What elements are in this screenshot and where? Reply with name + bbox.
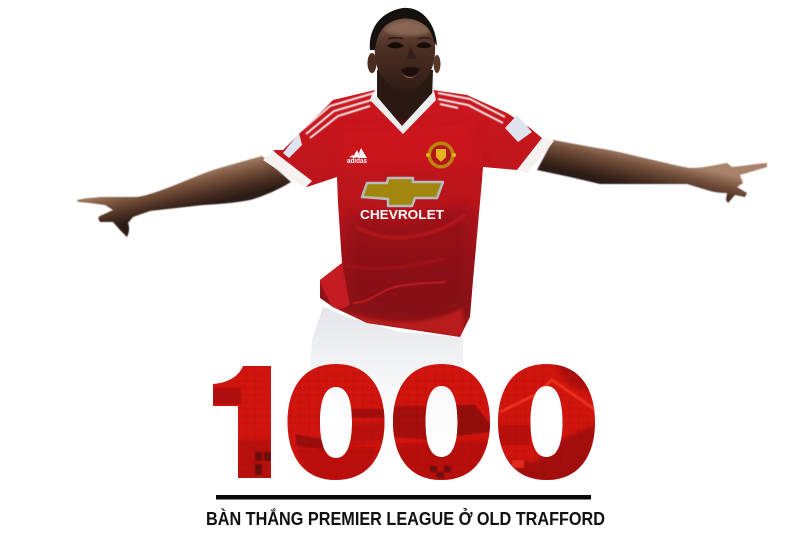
sleeve stripes bbox=[302, 93, 375, 138]
digit 0: 0 bbox=[494, 338, 599, 506]
digit 0: 0 bbox=[284, 338, 388, 506]
digit 0: 0 bbox=[390, 338, 494, 506]
photo: player celebrating bbox=[77, 8, 767, 470]
hair bbox=[370, 8, 437, 50]
left arm bbox=[77, 156, 291, 237]
stadium texture in digits bbox=[213, 364, 595, 480]
club crest bbox=[426, 142, 456, 168]
adidas logo bbox=[347, 148, 367, 165]
big number 1000 bbox=[213, 364, 595, 480]
caption: BÀN THẮNG PREMIER LEAGUE Ở OLD TRAFFORD bbox=[206, 508, 605, 529]
shorts bbox=[310, 307, 463, 470]
adidas logo: adidas bbox=[347, 156, 367, 165]
right sleeve badge bbox=[505, 115, 532, 142]
sponsor name: CHEVROLET bbox=[360, 208, 444, 222]
divider rule bbox=[216, 495, 591, 500]
eyes and mouth bbox=[387, 42, 432, 48]
right arm bbox=[537, 140, 767, 203]
digit 1: 1 bbox=[202, 338, 306, 506]
sponsor bowtie bbox=[362, 178, 443, 206]
left cuff bbox=[263, 151, 312, 188]
neck bbox=[377, 70, 433, 133]
head bbox=[368, 8, 440, 91]
shirt shading bbox=[302, 93, 505, 336]
left sleeve badge bbox=[283, 133, 302, 158]
forehead highlight bbox=[384, 22, 430, 36]
shirt bbox=[263, 90, 554, 337]
collar bbox=[370, 91, 436, 134]
right cuff bbox=[517, 137, 554, 173]
